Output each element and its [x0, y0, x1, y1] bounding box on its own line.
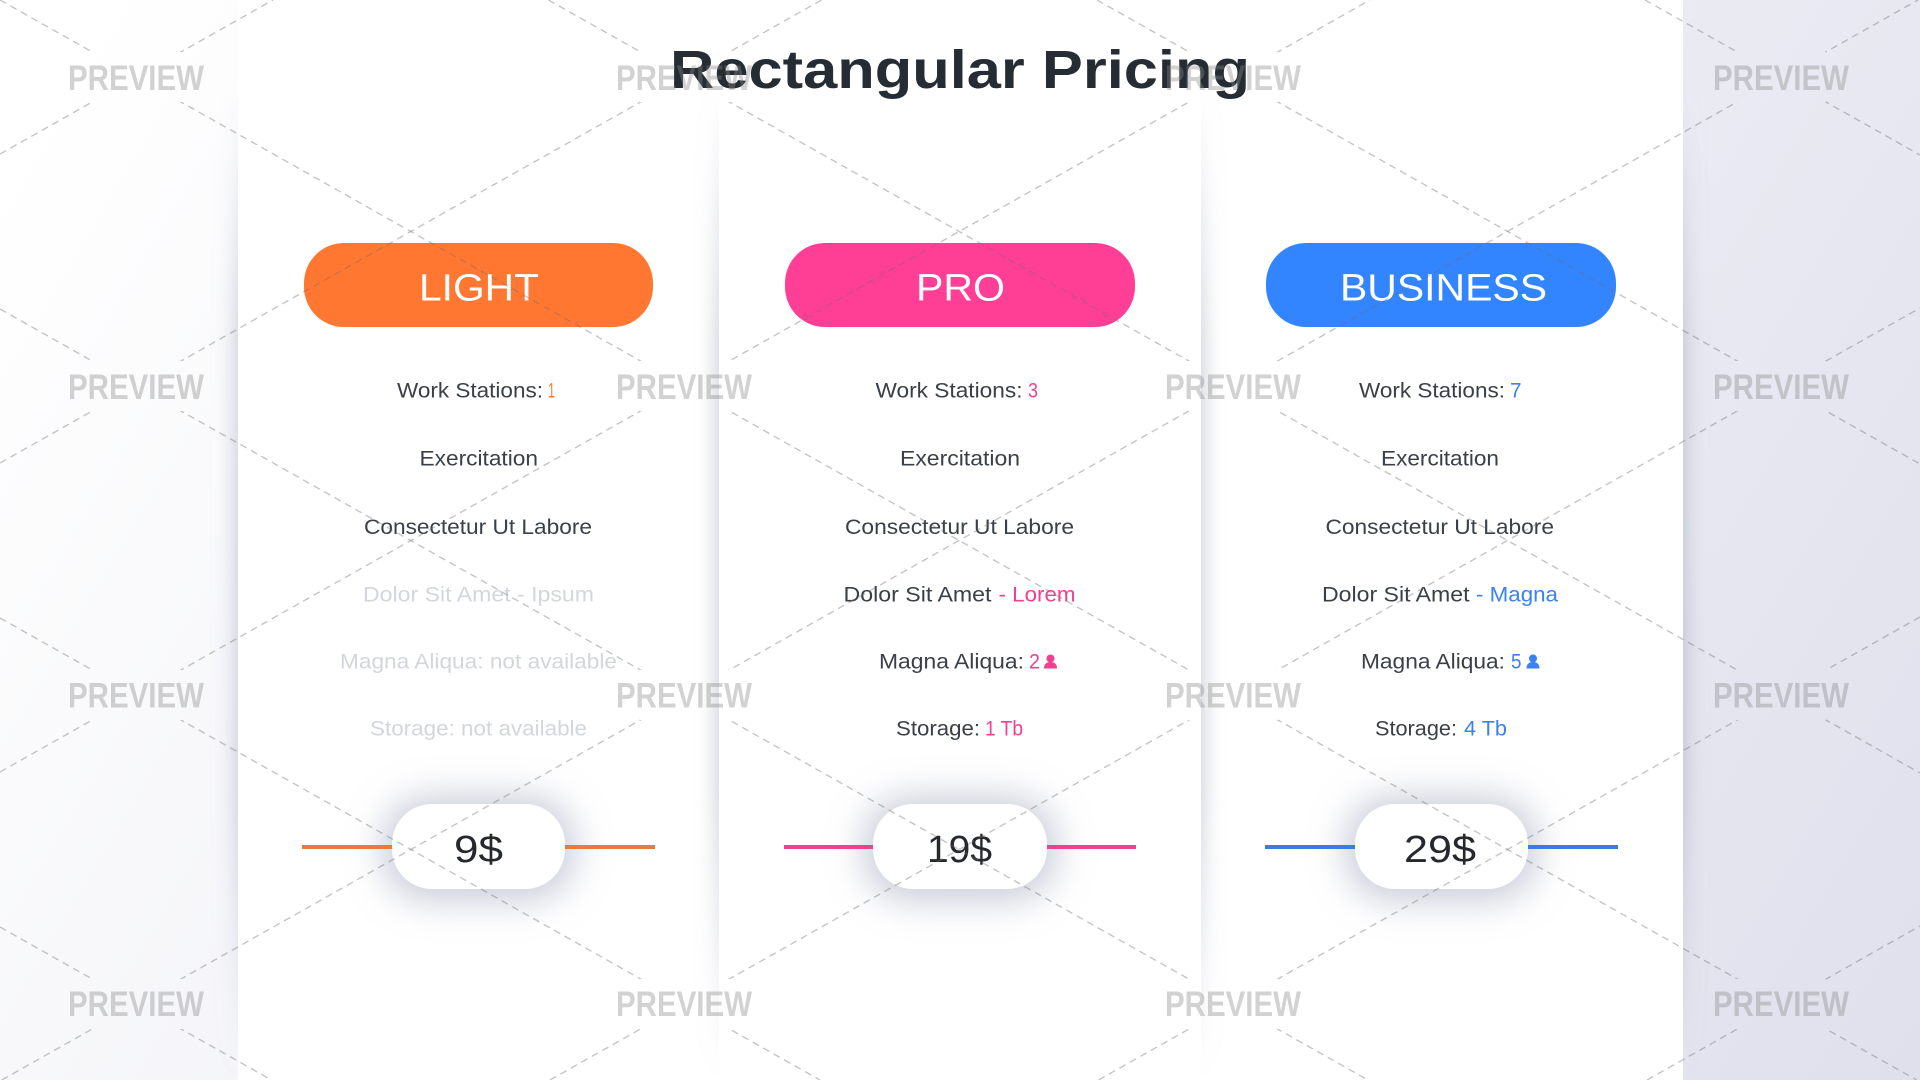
watermark labels: PREVIEW [616, 676, 752, 716]
icon: person [1526, 654, 1540, 668]
features: business: Consectetur Ut Labore [1326, 516, 1554, 539]
features: pro: Exercitation [900, 448, 1020, 470]
features: business: Work Stations: [1359, 380, 1505, 402]
watermark labels: PREVIEW [1165, 59, 1301, 98]
features: light: Exercitation [420, 448, 538, 470]
watermark labels: PREVIEW [616, 59, 752, 98]
plan badge: pro: PRO [916, 268, 1005, 310]
plan badge: light [304, 243, 653, 327]
watermark labels: PREVIEW [1713, 368, 1849, 407]
column: business [1265, 243, 1618, 901]
watermark labels: PREVIEW [68, 368, 204, 407]
features: pro: Magna Aliqua: [879, 650, 1024, 674]
price: light [302, 796, 655, 901]
features: pro: Work Stations: [876, 380, 1022, 402]
features: business: Dolor Sit Amet [1322, 584, 1470, 606]
features: business: 5 [1511, 650, 1522, 674]
price: business: 29$ [1404, 829, 1476, 871]
features: pro: 1 Tb [985, 718, 1023, 740]
watermark labels: PREVIEW [1165, 985, 1301, 1024]
features: light: Storage: not available [370, 718, 587, 740]
watermark labels: PREVIEW [616, 985, 752, 1024]
price: light: 9$ [454, 829, 503, 871]
features: light: Consectetur Ut Labore [364, 516, 592, 539]
features: light: 1 [548, 380, 555, 402]
features: business: 7 [1510, 380, 1522, 402]
features: pro: Consectetur Ut Labore [845, 516, 1074, 539]
features: business [1322, 380, 1558, 740]
watermark labels: PREVIEW [1165, 676, 1301, 716]
panel: light [238, 0, 719, 1080]
panel: pro [719, 0, 1201, 1080]
features: light: Work Stations: [397, 380, 543, 402]
features: business: - Magna [1476, 584, 1558, 606]
plan badge: pro [785, 243, 1135, 327]
features: business: Exercitation [1381, 448, 1499, 470]
features: light: Dolor Sit Amet - Ipsum [363, 584, 594, 606]
icon: person [1044, 654, 1057, 668]
features: business: 4 Tb [1464, 718, 1507, 740]
watermark labels: PREVIEW [1165, 368, 1301, 407]
features: pro: 3 [1028, 380, 1038, 402]
watermark labels: PREVIEW [1713, 59, 1849, 98]
features: light [340, 380, 617, 740]
features: light: Magna Aliqua: not available [340, 650, 617, 674]
features: pro: - Lorem [998, 584, 1076, 606]
plan badge: business [1266, 243, 1616, 327]
features: pro: 2 [1029, 650, 1040, 674]
column: light [302, 243, 655, 901]
price: pro: 19$ [927, 829, 992, 871]
watermark labels: PREVIEW [616, 368, 752, 407]
plan badge: business: BUSINESS [1340, 268, 1547, 310]
watermark labels: PREVIEW [68, 59, 204, 98]
features: business: Storage: [1375, 718, 1457, 740]
watermark labels: PREVIEW [1713, 676, 1849, 716]
price: pro [784, 796, 1136, 901]
price: business [1265, 796, 1618, 901]
features: pro: Storage: [896, 718, 980, 740]
panel: business [1201, 0, 1683, 1080]
plan badge: light: LIGHT [419, 268, 539, 310]
features: business: Magna Aliqua: [1361, 650, 1505, 674]
watermark labels: PREVIEW [68, 985, 204, 1024]
watermark labels: PREVIEW [68, 676, 204, 716]
features: pro [844, 380, 1076, 740]
features: pro: Dolor Sit Amet [844, 584, 992, 606]
column: pro [784, 243, 1136, 901]
watermark labels: PREVIEW [1713, 985, 1849, 1024]
title: Rectangular Pricing [670, 40, 1250, 100]
